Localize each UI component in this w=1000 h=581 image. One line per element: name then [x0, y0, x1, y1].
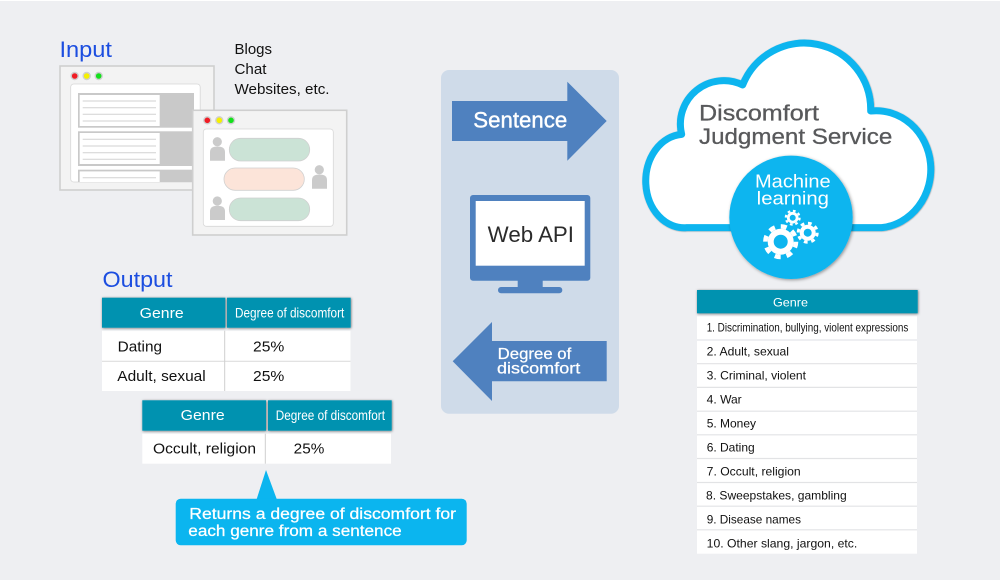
text block: input sources: Chat — [234, 62, 266, 78]
table: output one: 25% — [253, 338, 284, 355]
table: genre list: Genre — [773, 295, 808, 309]
table: genre list: 1. Discrimination, bullying, violent expressions — [707, 321, 908, 335]
callout: returns degree of discomfort: Returns a degree of discomfort for — [189, 506, 456, 523]
text block: input sources — [234, 42, 330, 98]
table: genre list: 5. Money — [707, 416, 756, 430]
machine learning badge — [729, 156, 853, 279]
text: service name: Discomfort — [699, 101, 819, 126]
panel: blog browser window — [60, 66, 214, 190]
table: output two: Occult, religion — [153, 440, 256, 457]
icon: monitor with Web API: Web API — [488, 222, 574, 247]
arrow: sentence: Sentence — [473, 108, 567, 133]
table: output two: Genre — [181, 407, 225, 424]
table: genre list: 8. Sweepstakes, gambling — [706, 488, 847, 502]
text block: input sources: Websites, etc. — [234, 82, 330, 98]
heading: Input: Input — [60, 37, 112, 62]
icon: cloud service — [646, 43, 931, 279]
callout: returns degree of discomfort: each genre from a sentence — [188, 523, 402, 540]
arrow: degree of discomfort: Degree of — [498, 346, 572, 363]
table: genre list: 9. Disease names — [707, 512, 801, 526]
table: genre list: 6. Dating — [707, 440, 755, 454]
panel: chat browser window — [193, 110, 347, 235]
panel: Web API — [441, 70, 619, 414]
table: output one: Genre — [140, 305, 184, 322]
callout: returns degree of discomfort — [176, 470, 467, 545]
machine learning badge: learning — [757, 188, 829, 208]
table: output two: Degree of discomfort — [276, 407, 385, 423]
table: genre list: 3. Criminal, violent — [707, 369, 807, 383]
table: genre list — [697, 290, 918, 554]
table: output one: 25% — [253, 368, 284, 385]
table: output one: Degree of discomfort — [235, 304, 344, 320]
table: output one: Adult, sexual — [117, 368, 206, 385]
machine learning badge: Machine — [755, 171, 831, 191]
text block: input sources: Blogs — [234, 42, 272, 58]
icon: monitor with Web API — [470, 195, 590, 293]
arrow: degree of discomfort — [453, 322, 607, 401]
table: genre list: 2. Adult, sexual — [707, 345, 789, 359]
table: genre list: 10. Other slang, jargon, etc. — [707, 536, 857, 550]
table: output two — [142, 400, 392, 464]
text: service name — [699, 101, 892, 149]
icon: gears — [765, 211, 817, 257]
arrow: sentence — [452, 82, 607, 161]
text: service name: Judgment Service — [699, 124, 892, 149]
table: output one: Dating — [118, 338, 162, 355]
table: genre list: 7. Occult, religion — [707, 464, 801, 478]
table: genre list: 4. War — [707, 392, 742, 406]
table: output two: 25% — [294, 440, 324, 457]
arrow: degree of discomfort: discomfort — [497, 361, 581, 378]
table: output one — [102, 298, 351, 391]
heading: Output: Output — [102, 267, 172, 292]
